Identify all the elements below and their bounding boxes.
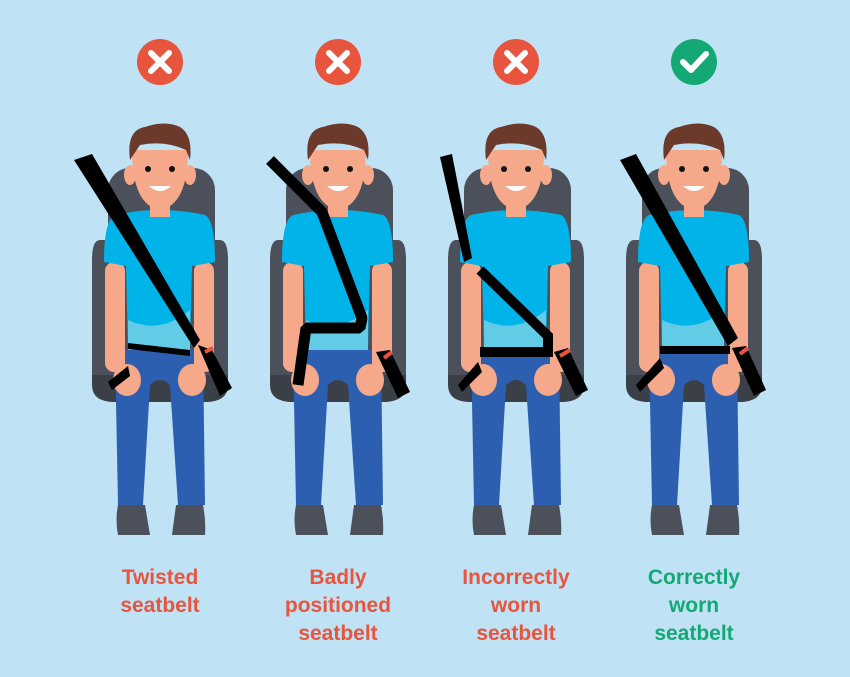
label: seatbelt	[476, 622, 556, 645]
label: Incorrectly	[462, 566, 570, 589]
label: seatbelt	[298, 622, 378, 645]
icon: check	[671, 39, 717, 85]
icon: cross	[493, 39, 539, 85]
figure	[440, 124, 588, 535]
column: correctly worn	[620, 39, 766, 645]
icon: cross	[137, 39, 183, 85]
label: Correctly	[648, 566, 740, 589]
label: Twisted	[122, 566, 198, 589]
icon: cross	[315, 39, 361, 85]
figure	[74, 124, 232, 535]
column: twisted	[74, 39, 232, 617]
label: seatbelt	[654, 622, 734, 645]
figure	[270, 124, 410, 535]
label: worn	[490, 594, 541, 617]
label: worn	[668, 594, 719, 617]
label: Badly	[309, 566, 367, 589]
column: badly positioned	[270, 39, 410, 645]
column: incorrectly worn	[440, 39, 588, 645]
figure	[620, 124, 766, 535]
label: seatbelt	[120, 594, 200, 617]
label: positioned	[285, 594, 391, 617]
